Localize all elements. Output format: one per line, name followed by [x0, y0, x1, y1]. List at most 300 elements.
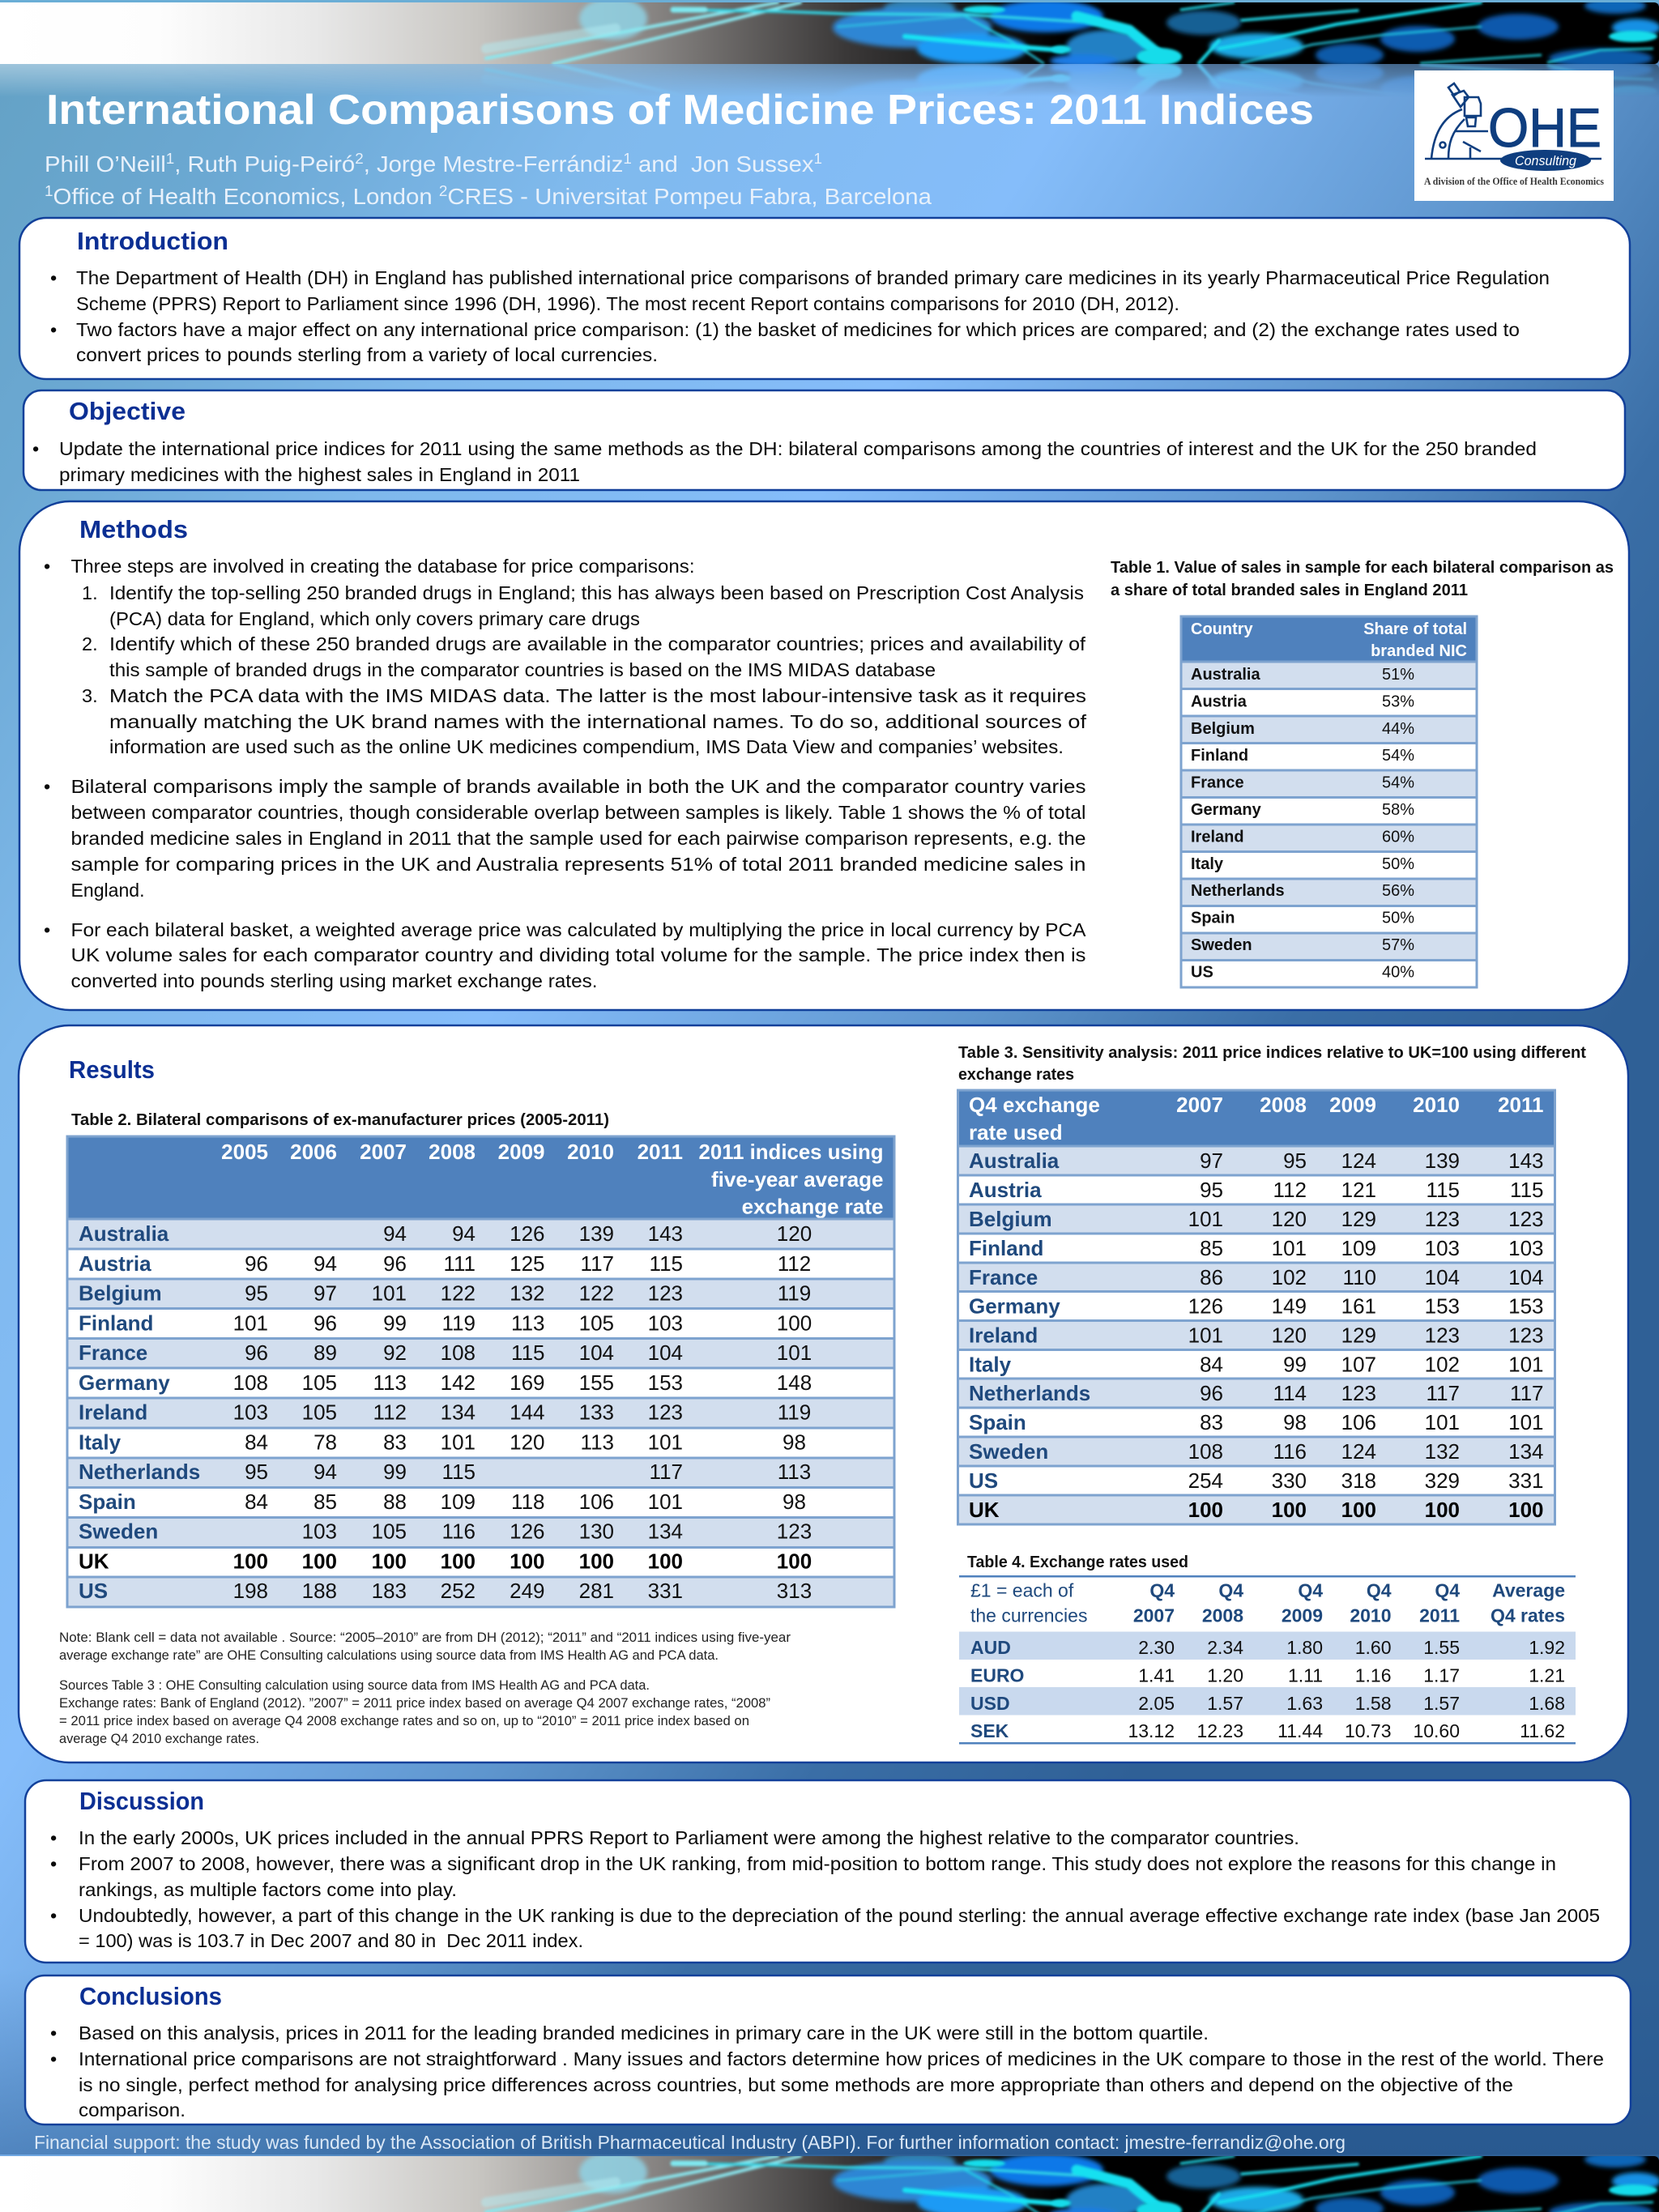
table 1 header: [1181, 616, 1477, 662]
text block: conclusion bullets: International price comparisons are not straightforward . Many issues and factors determine how prices of medicines in the UK compare to those in the rest of the world. There: [79, 2048, 1604, 2069]
text block: conclusion bullets: [50, 2022, 1604, 2120]
table 1 caption: [1111, 558, 1614, 599]
bottom decorative banner: [0, 2151, 1659, 2212]
table 3: sensitivity analysis: 132: [1425, 1439, 1460, 1464]
table 4: exchange rates: EURO: [970, 1665, 1024, 1686]
text block: conclusion bullets: •: [50, 2048, 57, 2069]
table 2: bilateral comparisons: 113: [581, 1430, 614, 1454]
text block: introduction bullets: •: [50, 267, 57, 288]
table 4 header: 2009: [1282, 1605, 1323, 1626]
table 3: sensitivity analysis: 109: [1341, 1236, 1376, 1260]
text block: method steps: 1.: [82, 582, 98, 603]
text block: discussion bullets: = 100) was is 103.7 in Dec 2007 and 80 in Dec 2011 index.: [79, 1930, 583, 1951]
table 4: exchange rates: 1.21: [1529, 1665, 1565, 1686]
panel: Conclusions: [25, 1975, 1631, 2125]
table 2: bilateral comparisons: 95: [245, 1281, 268, 1306]
table 3 header: [957, 1090, 1555, 1146]
table notes: [59, 1630, 791, 1746]
table 2 header: five-year average: [711, 1167, 883, 1191]
table 2: bilateral comparisons: 134: [648, 1519, 683, 1544]
table 3: sensitivity analysis: 108: [1188, 1439, 1223, 1464]
table 2: bilateral comparisons: Australia: [79, 1221, 169, 1246]
table 3: sensitivity analysis: 331: [1508, 1468, 1544, 1493]
table 3: sensitivity analysis: 124: [1341, 1149, 1376, 1173]
text block: conclusion bullets: Based on this analysis, prices in 2011 for the leading branded medicines in primary care in the UK were still in the bottom quartile.: [79, 2022, 1209, 2044]
table 1: share of branded sales: 50%: [1382, 855, 1414, 873]
table 2: bilateral comparisons: 94: [383, 1221, 407, 1246]
table 3: sensitivity analysis: 115: [1427, 1178, 1460, 1202]
table 1: share of branded sales: 58%: [1382, 801, 1414, 819]
table 3: sensitivity analysis: 95: [1200, 1178, 1223, 1202]
table 2: bilateral comparisons: 95: [245, 1460, 268, 1484]
table 1 header: branded NIC: [1371, 642, 1467, 660]
table 1 caption: a share of total branded sales in England 2011: [1111, 581, 1468, 599]
table 2: bilateral comparisons: 100: [510, 1549, 544, 1573]
text block: conclusion bullets: is no single, perfect method for analysing price differences across countries, but some methods are more appropriate than others and depend on the objective of the: [79, 2074, 1513, 2095]
table 3: sensitivity analysis: [957, 1090, 1555, 1524]
table 3: sensitivity analysis: Netherlands: [969, 1381, 1090, 1405]
table 3: sensitivity analysis: 101: [1425, 1410, 1460, 1434]
table 2: bilateral comparisons: 142: [441, 1370, 476, 1395]
table 3: sensitivity analysis: 149: [1272, 1294, 1307, 1319]
table 2: bilateral comparisons: 112: [778, 1251, 811, 1276]
table 2: bilateral comparisons: 119: [778, 1281, 811, 1306]
table 1: share of branded sales: [1181, 616, 1477, 987]
authors: 2: [355, 151, 364, 167]
table notes: Exchange rates: Bank of England (2012). ”2007” = 2011 price index based on average Q4 2007 exchange rates, “2008”: [59, 1696, 770, 1711]
table notes: = 2011 price index based on average Q4 2008 exchange rates and so on, up to “2010” = 2011 price index based on: [59, 1714, 749, 1728]
heading: Results: Results: [69, 1055, 155, 1084]
table 2: bilateral comparisons: 117: [650, 1460, 683, 1484]
affiliations: CRES - Universitat Pompeu Fabra, Barcelona: [447, 184, 932, 209]
table 2: bilateral comparisons: 113: [373, 1370, 407, 1395]
table 3: sensitivity analysis: 117: [1510, 1381, 1544, 1405]
table 3: sensitivity analysis: 104: [1508, 1265, 1544, 1289]
text block: weighted average bullet: UK volume sales for each comparator country and dividing total volume for the sample. The price index then is: [71, 944, 1085, 965]
table 4: exchange rates: 1.58: [1355, 1693, 1392, 1714]
table 3: sensitivity analysis: 112: [1273, 1178, 1307, 1202]
text block: discussion bullets: Undoubtedly, however, a part of this change in the UK ranking is due to the depreciation of the pound sterling: the annual average effective exchange rate index (base Jan 2005: [79, 1905, 1600, 1926]
table 3: sensitivity analysis: 100: [1272, 1498, 1307, 1522]
logo tagline: A division of the Office of Health Economics: [1424, 175, 1604, 187]
table 1: share of branded sales: 54%: [1382, 774, 1414, 792]
table 4: exchange rates: 11.44: [1277, 1720, 1323, 1741]
table 3: sensitivity analysis: 129: [1341, 1323, 1376, 1348]
table 2 header: 2006: [290, 1140, 337, 1164]
table 3: sensitivity analysis: 100: [1341, 1498, 1376, 1522]
table 3: sensitivity analysis: 101: [1188, 1207, 1223, 1231]
table 2: bilateral comparisons: 105: [302, 1370, 337, 1395]
table 2: bilateral comparisons: 94: [313, 1460, 337, 1484]
table 3: sensitivity analysis: 161: [1341, 1294, 1376, 1319]
table 2: bilateral comparisons: 84: [245, 1430, 268, 1454]
table 4 header: Q4: [1298, 1579, 1323, 1600]
table 1: share of branded sales: Italy: [1191, 855, 1224, 873]
table 2: bilateral comparisons: 105: [579, 1311, 614, 1335]
table 2: bilateral comparisons: 97: [313, 1281, 337, 1306]
table 2 header: [67, 1136, 894, 1219]
table 4: exchange rates: 10.73: [1345, 1720, 1392, 1741]
table 1: share of branded sales: 56%: [1382, 882, 1414, 900]
table 3: sensitivity analysis: 83: [1200, 1410, 1223, 1434]
table 2: bilateral comparisons: 100: [777, 1549, 812, 1573]
text block: bilateral comparisons bullet: branded medicine sales in England in 2011 that the sample used for each pairwise comparison represents, e.g. the: [71, 828, 1085, 849]
table 2: bilateral comparisons: 132: [510, 1281, 544, 1306]
table 4: exchange rates: 1.60: [1355, 1637, 1392, 1658]
table 3: sensitivity analysis: 96: [1200, 1381, 1223, 1405]
table 4: exchange rates: [959, 1575, 1576, 1745]
table 2: bilateral comparisons: 100: [233, 1549, 268, 1573]
table 3: sensitivity analysis: Germany: [969, 1294, 1060, 1319]
table 3: sensitivity analysis: Ireland: [969, 1323, 1038, 1348]
text block: introduction bullets: •: [50, 319, 57, 340]
icon: microscope: [1425, 83, 1601, 159]
table 2: bilateral comparisons: Spain: [79, 1490, 136, 1514]
table 2: bilateral comparisons: 143: [648, 1221, 683, 1246]
table 2: bilateral comparisons: 120: [777, 1221, 812, 1246]
table 1: share of branded sales: Finland: [1191, 747, 1248, 765]
text block: discussion bullets: •: [50, 1827, 57, 1848]
table 4 header: Q4: [1435, 1579, 1460, 1600]
table 4: exchange rates: 2.05: [1138, 1693, 1175, 1714]
table 3: sensitivity analysis: 123: [1508, 1323, 1544, 1348]
table 3: sensitivity analysis: 123: [1508, 1207, 1544, 1231]
table 2 header: 2005: [221, 1140, 268, 1164]
table 2: bilateral comparisons: 120: [510, 1430, 544, 1454]
table 3: sensitivity analysis: 107: [1341, 1353, 1376, 1377]
table 2: bilateral comparisons: 99: [383, 1311, 407, 1335]
table 2: bilateral comparisons: 313: [777, 1579, 812, 1603]
table 4: exchange rates: 1.20: [1207, 1665, 1243, 1686]
text block: discussion bullets: •: [50, 1905, 57, 1926]
table 2: bilateral comparisons: 106: [579, 1490, 614, 1514]
table 3: sensitivity analysis: 101: [1508, 1353, 1544, 1377]
table 2 header: 2011: [638, 1140, 683, 1164]
table 2 header: exchange rate: [742, 1194, 883, 1218]
table 3: sensitivity analysis: 102: [1272, 1265, 1307, 1289]
table 2: bilateral comparisons: 88: [383, 1490, 407, 1514]
text block: objective bullet: •: [32, 438, 39, 459]
text block: discussion bullets: [50, 1827, 1600, 1951]
table 2: bilateral comparisons: 104: [648, 1340, 683, 1365]
table 2: bilateral comparisons: 83: [383, 1430, 407, 1454]
table 2: bilateral comparisons: 89: [313, 1340, 337, 1365]
table 4: exchange rates: 1.57: [1207, 1693, 1243, 1714]
panel: Objective: [23, 390, 1625, 490]
table 2 header: 2007: [360, 1140, 407, 1164]
table 2: bilateral comparisons: 112: [373, 1400, 407, 1424]
table 4: exchange rates: 2.30: [1138, 1637, 1175, 1658]
table 2: bilateral comparisons: 98: [783, 1430, 806, 1454]
table 2: bilateral comparisons: 148: [777, 1370, 812, 1395]
table 2: bilateral comparisons: 105: [372, 1519, 407, 1544]
table 2: bilateral comparisons: 115: [442, 1460, 476, 1484]
table 2: bilateral comparisons: 122: [579, 1281, 614, 1306]
table 3 header: 2009: [1329, 1093, 1376, 1117]
table 4: exchange rates: 1.17: [1423, 1665, 1460, 1686]
table 4: exchange rates: 2.34: [1207, 1637, 1243, 1658]
table 4 header: 2007: [1133, 1605, 1175, 1626]
table 3: sensitivity analysis: 84: [1200, 1353, 1223, 1377]
table 2: bilateral comparisons: 84: [245, 1490, 268, 1514]
text block: method steps: Match the PCA data with the IMS MIDAS data. The latter is the most labour-intensive task as it requires: [109, 685, 1086, 706]
table 1 header: Share of total: [1363, 620, 1467, 638]
table 2: bilateral comparisons: 169: [510, 1370, 544, 1395]
table 4 header: 2011: [1419, 1605, 1460, 1626]
table 2: bilateral comparisons: 103: [302, 1519, 337, 1544]
text block: bilateral comparisons bullet: •: [44, 776, 50, 797]
table 4: exchange rates: USD: [970, 1693, 1010, 1714]
table 1: share of branded sales: 50%: [1382, 910, 1414, 927]
table 3: sensitivity analysis: France: [969, 1265, 1038, 1289]
table 3: sensitivity analysis: 134: [1508, 1439, 1544, 1464]
table 4 header: Average: [1492, 1579, 1565, 1600]
table 2: bilateral comparisons: Germany: [79, 1370, 170, 1395]
authors: and Jon Sussex: [632, 151, 814, 177]
table 2: bilateral comparisons: 111: [443, 1251, 476, 1276]
table 2: bilateral comparisons: 188: [302, 1579, 337, 1603]
table 3: sensitivity analysis: 103: [1508, 1236, 1544, 1260]
table 2: bilateral comparisons: 101: [372, 1281, 407, 1306]
table 2: bilateral comparisons: France: [79, 1340, 147, 1365]
table 3: sensitivity analysis: 101: [1508, 1410, 1544, 1434]
text block: method steps: 2.: [82, 633, 98, 654]
table 3 caption: Table 3. Sensitivity analysis: 2011 price indices relative to UK=100 using different: [958, 1043, 1586, 1062]
table 3: sensitivity analysis: 123: [1341, 1381, 1376, 1405]
table 2: bilateral comparisons: 281: [579, 1579, 614, 1603]
text block: method steps: Three steps are involved in creating the database for price comparisons:: [71, 556, 694, 577]
table 4: exchange rates: 1.11: [1288, 1665, 1323, 1686]
heading: Introduction: Introduction: [77, 227, 228, 255]
text block: weighted average bullet: converted into pounds sterling using market exchange rates.: [71, 970, 597, 991]
text block: method steps: information are used such as the online UK medicines compendium, IMS Data View and companies’ websites.: [109, 736, 1064, 757]
text block: discussion bullets: rankings, as multiple factors come into play.: [79, 1879, 457, 1900]
authors: , Ruth Puig-Peiró: [174, 151, 355, 177]
table 3: sensitivity analysis: 120: [1272, 1323, 1307, 1348]
table 2: bilateral comparisons: 101: [648, 1490, 683, 1514]
table 2: bilateral comparisons: Netherlands: [79, 1460, 200, 1484]
table 4: exchange rates: 1.68: [1529, 1693, 1565, 1714]
table 2: bilateral comparisons: 108: [441, 1340, 476, 1365]
table 3: sensitivity analysis: 129: [1341, 1207, 1376, 1231]
table 1: share of branded sales: France: [1191, 774, 1244, 792]
table 2: bilateral comparisons: 183: [372, 1579, 407, 1603]
text block: weighted average bullet: [44, 919, 1086, 991]
table 1: share of branded sales: Spain: [1191, 910, 1235, 927]
table 3: sensitivity analysis: 104: [1425, 1265, 1460, 1289]
table 2: bilateral comparisons: 94: [313, 1251, 337, 1276]
table 3: sensitivity analysis: Finland: [969, 1236, 1043, 1260]
table 3: sensitivity analysis: 121: [1341, 1178, 1376, 1202]
table 2: bilateral comparisons: 198: [233, 1579, 268, 1603]
table 1: share of branded sales: 54%: [1382, 747, 1414, 765]
table 3: sensitivity analysis: 123: [1425, 1207, 1460, 1231]
table 3: sensitivity analysis: 99: [1283, 1353, 1307, 1377]
authors: , Jorge Mestre-Ferrándiz: [364, 151, 623, 177]
table 4: exchange rates: 1.16: [1355, 1665, 1392, 1686]
table 2: bilateral comparisons: 331: [648, 1579, 683, 1603]
table 2: bilateral comparisons: 153: [648, 1370, 683, 1395]
table 3: sensitivity analysis: 139: [1425, 1149, 1460, 1173]
text block: objective bullet: [32, 438, 1537, 485]
logo badge: Consulting: [1515, 153, 1577, 168]
table 2: bilateral comparisons: 252: [441, 1579, 476, 1603]
text block: bilateral comparisons bullet: [44, 776, 1085, 901]
table 2: bilateral comparisons: 103: [233, 1400, 268, 1424]
text block: discussion bullets: From 2007 to 2008, however, there was a significant drop in the UK ranking, from mid-position to bottom range. This study does not explore the reasons for this change in: [79, 1853, 1556, 1874]
table 3: sensitivity analysis: 106: [1341, 1410, 1376, 1434]
table 2: bilateral comparisons: Sweden: [79, 1519, 158, 1544]
table 2: bilateral comparisons: 100: [302, 1549, 337, 1573]
table 4: exchange rates: SEK: [970, 1720, 1009, 1741]
text block: method steps: (PCA) data for England, which only covers primary care drugs: [109, 608, 640, 629]
table 3: sensitivity analysis: Italy: [969, 1353, 1012, 1377]
panel: Discussion: [25, 1780, 1631, 1963]
table 2: bilateral comparisons: Italy: [79, 1430, 122, 1454]
table 1 header: Country: [1191, 620, 1254, 638]
footer: funding and contact: Financial support: the study was funded by the Association of British Pharmaceutical Industry (ABPI). For further information contact: jmestre-ferrandiz@ohe.org: [34, 2132, 1346, 2153]
text block: bilateral comparisons bullet: sample for comparing prices in the UK and Australia represents 51% of total 2011 branded medicine sales in: [71, 854, 1085, 875]
table 3: sensitivity analysis: 110: [1343, 1265, 1376, 1289]
table 3: sensitivity analysis: 114: [1273, 1381, 1307, 1405]
table 4: exchange rates: 11.62: [1520, 1720, 1565, 1741]
table 2: bilateral comparisons: 117: [581, 1251, 614, 1276]
table 3: sensitivity analysis: 97: [1200, 1149, 1223, 1173]
heading: Discussion: Discussion: [79, 1787, 204, 1815]
table 2: bilateral comparisons: Finland: [79, 1311, 153, 1335]
table 2: bilateral comparisons: 126: [510, 1221, 544, 1246]
table 2: bilateral comparisons: 119: [778, 1400, 811, 1424]
table notes: average Q4 2010 exchange rates.: [59, 1732, 259, 1746]
table 2: bilateral comparisons: 96: [383, 1251, 407, 1276]
table 3: sensitivity analysis: 153: [1425, 1294, 1460, 1319]
table 4 header: Q4: [1218, 1579, 1243, 1600]
table 2: bilateral comparisons: 99: [383, 1460, 407, 1484]
table notes: Note: Blank cell = data not available . Source: “2005–2010” are from DH (2012); “2011” and “2011 indices using five-year: [59, 1630, 791, 1645]
text block: objective bullet: Update the international price indices for 2011 using the same methods as the DH: bilateral comparisons among the countries of interest and the UK for the 250 branded: [59, 438, 1537, 459]
text block: weighted average bullet: For each bilateral basket, a weighted average price was calculated by multiplying the price in local currency by PCA: [71, 919, 1086, 940]
table 3: sensitivity analysis: 100: [1425, 1498, 1460, 1522]
table 1: share of branded sales: Australia: [1191, 666, 1260, 684]
table 2: bilateral comparisons: 126: [510, 1519, 544, 1544]
logo badge: [1500, 150, 1591, 171]
panel: Introduction: [19, 218, 1630, 379]
table 1: share of branded sales: 51%: [1382, 666, 1414, 684]
table 3: sensitivity analysis: US: [969, 1468, 998, 1493]
table 3: sensitivity analysis: 120: [1272, 1207, 1307, 1231]
table 2: bilateral comparisons: 130: [579, 1519, 614, 1544]
table 4: exchange rates: 10.60: [1413, 1720, 1460, 1741]
table 2: bilateral comparisons: 101: [777, 1340, 812, 1365]
table 2: bilateral comparisons: 78: [313, 1430, 337, 1454]
text block: introduction bullets: convert prices to pounds sterling from a variety of local currencies.: [76, 344, 658, 365]
table 3: sensitivity analysis: Spain: [969, 1410, 1026, 1434]
table 3 header: Q4 exchange: [969, 1093, 1100, 1117]
table 4 header: Q4: [1367, 1579, 1392, 1600]
table 2: bilateral comparisons: 115: [511, 1340, 544, 1365]
table 2: bilateral comparisons: 123: [648, 1400, 683, 1424]
table 2: bilateral comparisons: 96: [245, 1340, 268, 1365]
table 2: bilateral comparisons: 94: [452, 1221, 476, 1246]
table 3: sensitivity analysis: Austria: [969, 1178, 1042, 1202]
table 2: bilateral comparisons: 109: [441, 1490, 476, 1514]
affiliations: Office of Health Economics, London: [53, 184, 439, 209]
table 3 header: 2010: [1413, 1093, 1460, 1117]
table 3: sensitivity analysis: UK: [969, 1498, 1000, 1522]
text block: method steps: Identify which of these 250 branded drugs are available in the comparator countries; prices and availability of: [109, 633, 1085, 654]
table 1: share of branded sales: US: [1191, 963, 1213, 981]
table 2: bilateral comparisons: 100: [777, 1311, 812, 1335]
table 3: sensitivity analysis: 86: [1200, 1265, 1223, 1289]
table 3: sensitivity analysis: 102: [1425, 1353, 1460, 1377]
heading: Methods: Methods: [79, 515, 188, 543]
table 2: bilateral comparisons: 119: [442, 1311, 476, 1335]
text block: objective bullet: primary medicines with the highest sales in England in 2011: [59, 464, 580, 485]
authors: 1: [814, 151, 822, 167]
table 3: sensitivity analysis: 85: [1200, 1236, 1223, 1260]
table 2: bilateral comparisons: Austria: [79, 1251, 151, 1276]
table 4: exchange rates: 1.41: [1138, 1665, 1175, 1686]
table 3: sensitivity analysis: 124: [1341, 1439, 1376, 1464]
table 2: bilateral comparisons: 108: [233, 1370, 268, 1395]
table 4: exchange rates: 13.12: [1128, 1720, 1175, 1741]
table 2: bilateral comparisons: 103: [648, 1311, 683, 1335]
panel: Methods: [19, 501, 1629, 1010]
affiliations: 1: [45, 183, 53, 199]
table 1: share of branded sales: Ireland: [1191, 828, 1244, 846]
table 2 caption: Table 2. Bilateral comparisons of ex-manufacturer prices (2005-2011): [71, 1110, 609, 1129]
table 3 caption: [958, 1043, 1586, 1084]
table 2: bilateral comparisons: Belgium: [79, 1281, 162, 1306]
table 2: bilateral comparisons: 139: [579, 1221, 614, 1246]
table 2: bilateral comparisons: 123: [648, 1281, 683, 1306]
table 4: exchange rates: 12.23: [1196, 1720, 1243, 1741]
table 1: share of branded sales: Germany: [1191, 801, 1262, 819]
logo: OHE Consulting: [1414, 70, 1614, 201]
table 2: bilateral comparisons: 100: [579, 1549, 614, 1573]
table notes: Sources Table 3 : OHE Consulting calculation using source data from IMS Health AG and PCA data.: [59, 1678, 650, 1693]
table 1: share of branded sales: Netherlands: [1191, 882, 1285, 900]
table 2: bilateral comparisons: 133: [579, 1400, 614, 1424]
text block: discussion bullets: In the early 2000s, UK prices included in the annual PPRS Report to Parliament were among the highest relative to the comparator countries.: [79, 1827, 1299, 1848]
table 1: share of branded sales: 60%: [1382, 828, 1414, 846]
table 4: exchange rates: 1.57: [1423, 1693, 1460, 1714]
table 2: bilateral comparisons: 105: [302, 1400, 337, 1424]
authors: Phill O’Neill: [45, 151, 160, 177]
text block: conclusion bullets: •: [50, 2022, 57, 2044]
text block: bilateral comparisons bullet: England.: [71, 880, 144, 901]
table 2: bilateral comparisons: 100: [372, 1549, 407, 1573]
text block: introduction bullets: [50, 267, 1550, 365]
table notes: average exchange rate” are OHE Consulting calculations using source data from IMS Health AG and PCA data.: [59, 1648, 719, 1663]
table 3: sensitivity analysis: 254: [1188, 1468, 1223, 1493]
text block: discussion bullets: •: [50, 1853, 57, 1874]
table 2: bilateral comparisons: 101: [441, 1430, 476, 1454]
text block: introduction bullets: The Department of Health (DH) in England has published international price comparisons of branded primary care medicines in its yearly Pharmaceutical Price Regulation: [76, 267, 1550, 288]
table 3: sensitivity analysis: 115: [1510, 1178, 1544, 1202]
text block: bilateral comparisons bullet: Bilateral comparisons imply the sample of brands available in both the UK and the comparator country varies: [71, 776, 1085, 797]
table 3: sensitivity analysis: 116: [1273, 1439, 1307, 1464]
authors: 1: [623, 151, 632, 167]
table 2: bilateral comparisons: 98: [783, 1490, 806, 1514]
table 3 header: 2011: [1498, 1093, 1544, 1117]
table 2: bilateral comparisons: 113: [778, 1460, 811, 1484]
text block: introduction bullets: Scheme (PPRS) Report to Parliament since 1996 (DH, 1996). The most recent Report contains comparisons for 2010 (DH, 2012).: [76, 293, 1179, 314]
table 3: sensitivity analysis: 95: [1283, 1149, 1307, 1173]
text block: method steps: 3.: [82, 685, 98, 706]
table 2: bilateral comparisons: 155: [579, 1370, 614, 1395]
table 4: exchange rates: AUD: [970, 1637, 1011, 1658]
